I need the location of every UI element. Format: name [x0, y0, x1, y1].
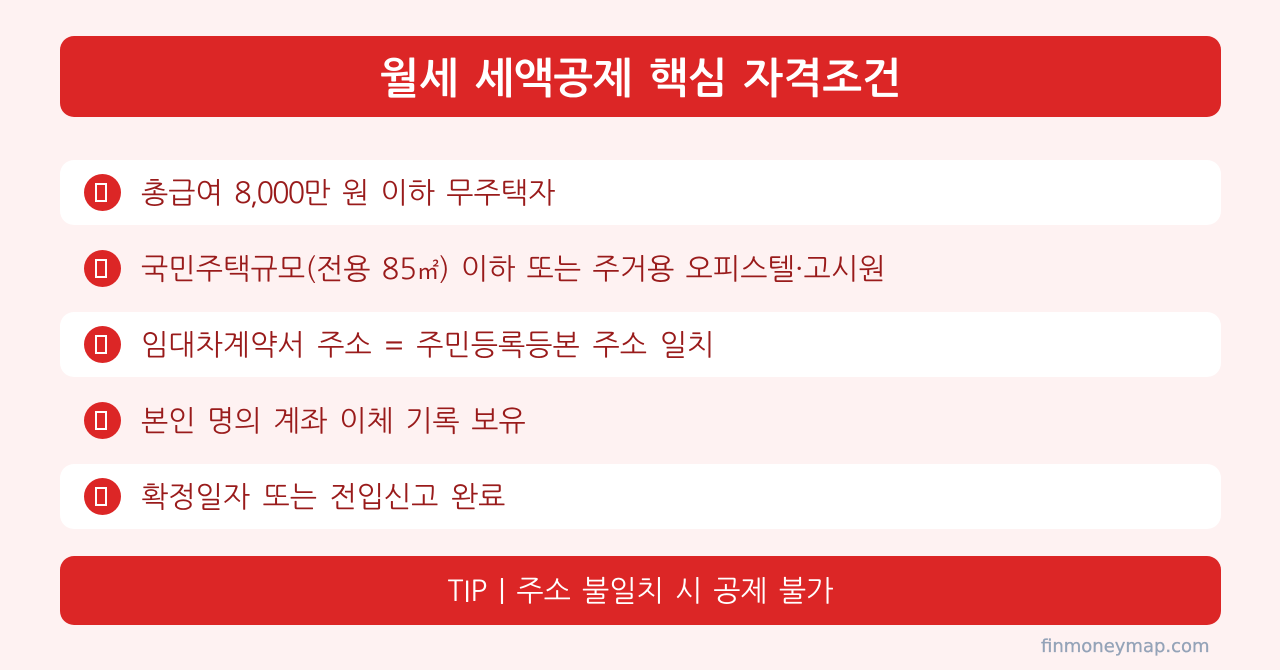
- text: condition 1: 총급여 8,000만 원 이하 무주택자: [141, 179, 555, 208]
- text: condition 4: 본인 명의 계좌 이체 기록 보유: [141, 407, 526, 436]
- text: condition 5: 확정일자 또는 전입신고 완료: [141, 483, 505, 512]
- tip banner: [60, 556, 1221, 625]
- brand watermark: finmoneymap.com: [1041, 636, 1210, 657]
- text: condition 3: 임대차계약서 주소 = 주민등록등본 주소 일치: [141, 331, 714, 360]
- panel: condition 1: [60, 160, 1221, 225]
- icon: condition 1 marker: [84, 174, 121, 211]
- title: [60, 36, 1221, 117]
- icon: condition 4 marker: [84, 402, 121, 439]
- icon: condition 3 marker: [84, 326, 121, 363]
- panel: condition 3: [60, 312, 1221, 377]
- panel: condition 5: [60, 464, 1221, 529]
- tip banner: TIP | 주소 불일치 시 공제 불가: [448, 577, 833, 606]
- panel: condition 4: [84, 402, 526, 439]
- icon: condition 5 marker: [84, 478, 121, 515]
- icon: condition 2 marker: [84, 250, 121, 287]
- title: 월세 세액공제 핵심 자격조건: [380, 59, 901, 100]
- text: condition 2: 국민주택규모(전용 85㎡) 이하 또는 주거용 오피스텔·고시원: [141, 254, 886, 286]
- panel: condition 2: [84, 250, 886, 287]
